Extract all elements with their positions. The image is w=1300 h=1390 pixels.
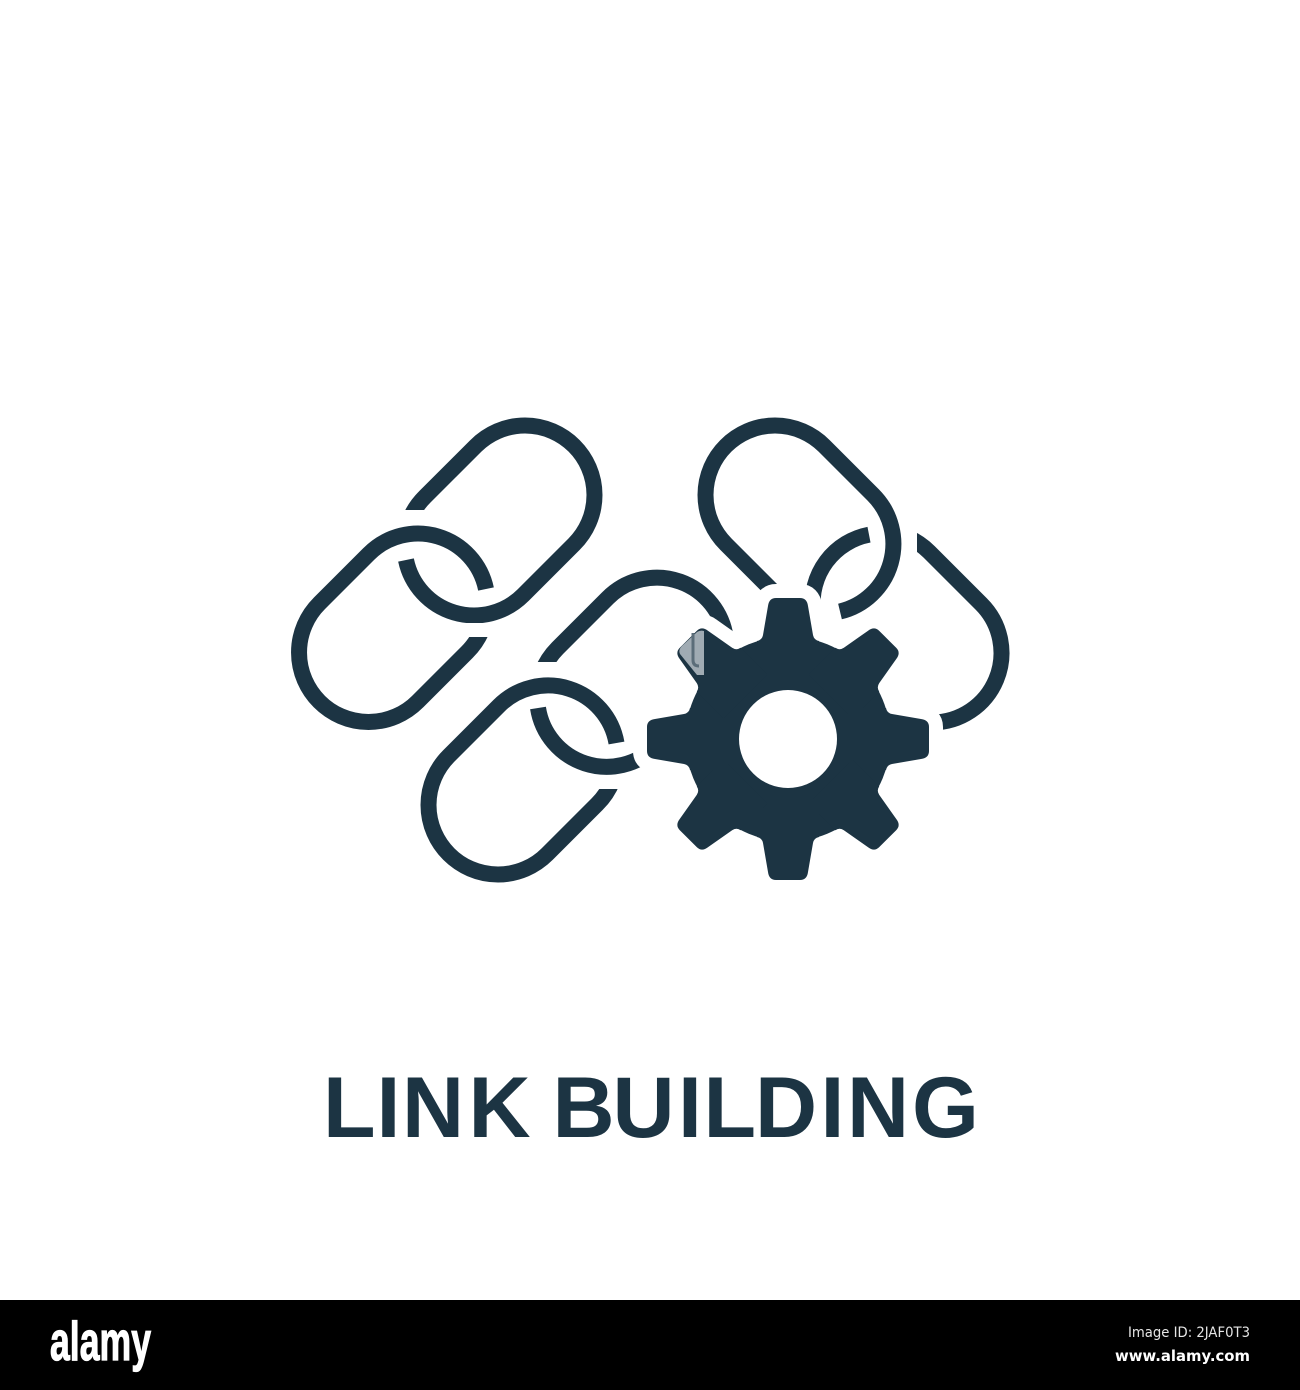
footer band — [0, 1300, 1300, 1390]
icon: top-left chain link — [395, 426, 594, 615]
icon: bottom chain link — [429, 685, 630, 874]
title: LINK BUILDING — [323, 1060, 979, 1156]
icon: link building chain and gear — [299, 426, 1001, 880]
icon: far-right chain link — [813, 520, 1001, 722]
icon: gear — [647, 598, 929, 880]
icon: top-right chain link — [706, 426, 893, 612]
logo: alamy: alamy — [50, 1310, 151, 1372]
icon: center chain link — [528, 578, 726, 767]
icon: left chain link — [299, 534, 500, 722]
website: www.alamy.com — [1115, 1347, 1250, 1365]
image ID: Image ID: 2JAF0T3 — [1128, 1325, 1250, 1341]
